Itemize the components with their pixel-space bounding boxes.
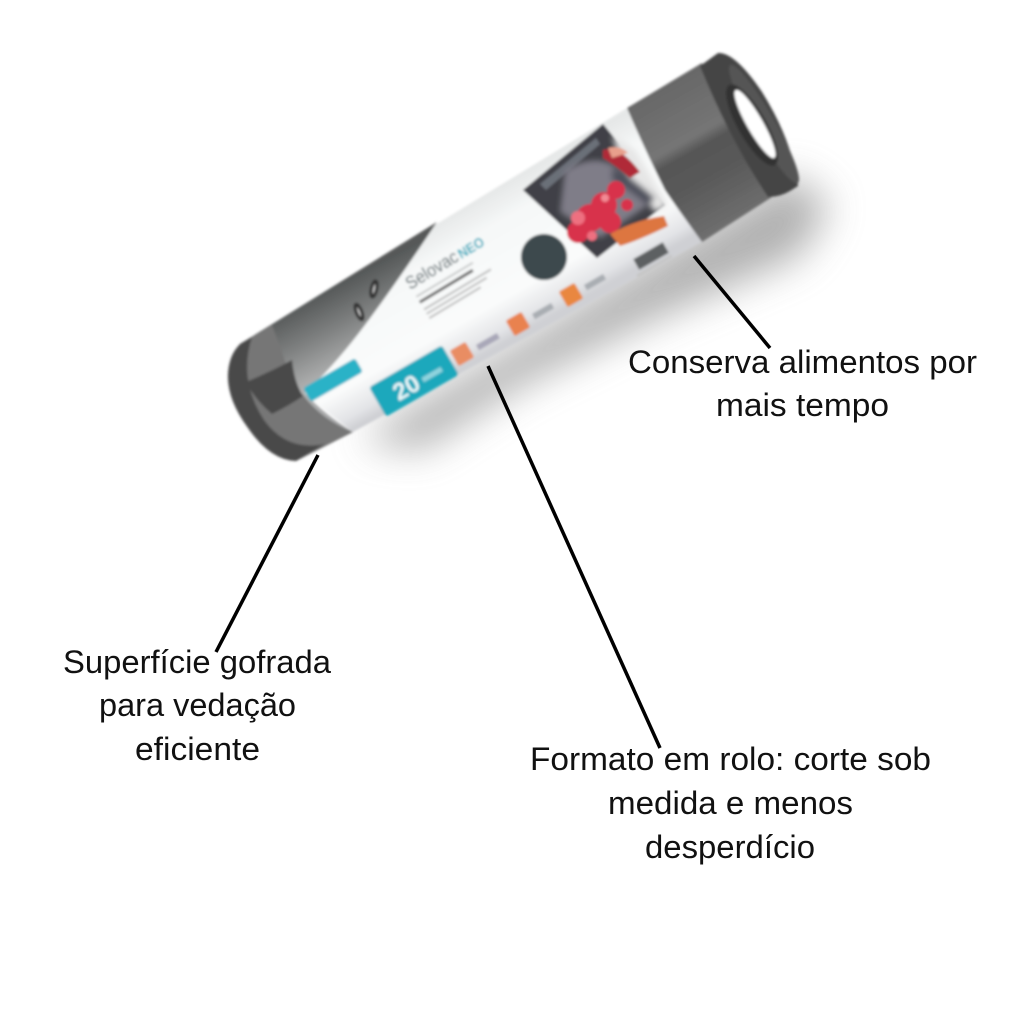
leader line: superfície [216,455,318,652]
orange feature icons [450,274,606,366]
red food cluster [567,181,633,243]
leader line: formato [488,366,660,748]
caption: superfície [63,644,331,767]
right rim [700,53,798,197]
black circle sample [521,234,567,280]
core hole [729,86,781,162]
logo and description [402,231,504,320]
left dark band [246,360,303,414]
rim outer ring [721,59,807,189]
teal tag [303,358,363,402]
left rim crescent [228,337,325,461]
logo and description: Selovac [402,246,462,293]
right grey section [627,63,772,242]
dark swoosh slots [354,281,378,320]
caption: conserva [628,344,977,423]
caption: superfície: para vedação [99,687,296,723]
barcode [629,242,672,277]
rim inner ring [717,78,787,172]
teal 20 badge: 20 [388,370,425,407]
caption: superfície: Superfície gofrada [63,644,331,680]
teal 20 badge [369,345,459,417]
roll shadow [360,175,830,450]
caption: conserva: Conserva alimentos por [628,344,977,380]
caption: formato: desperdício [645,829,815,865]
caption: formato: medida e menos [608,785,853,821]
left silver section with swoosh [240,222,437,461]
caption: formato [530,741,931,865]
left grey band [232,325,353,461]
caption: formato: Formato em rolo: corte sob [530,741,931,777]
logo and description: NEO [455,233,487,262]
product: vacuum bag roll [228,53,807,461]
photo of food in vacuum bag [523,124,668,258]
leader line: conserva [694,256,770,348]
caption: superfície: eficiente [135,731,260,767]
roll label body [240,108,705,432]
caption: conserva: mais tempo [716,387,889,423]
